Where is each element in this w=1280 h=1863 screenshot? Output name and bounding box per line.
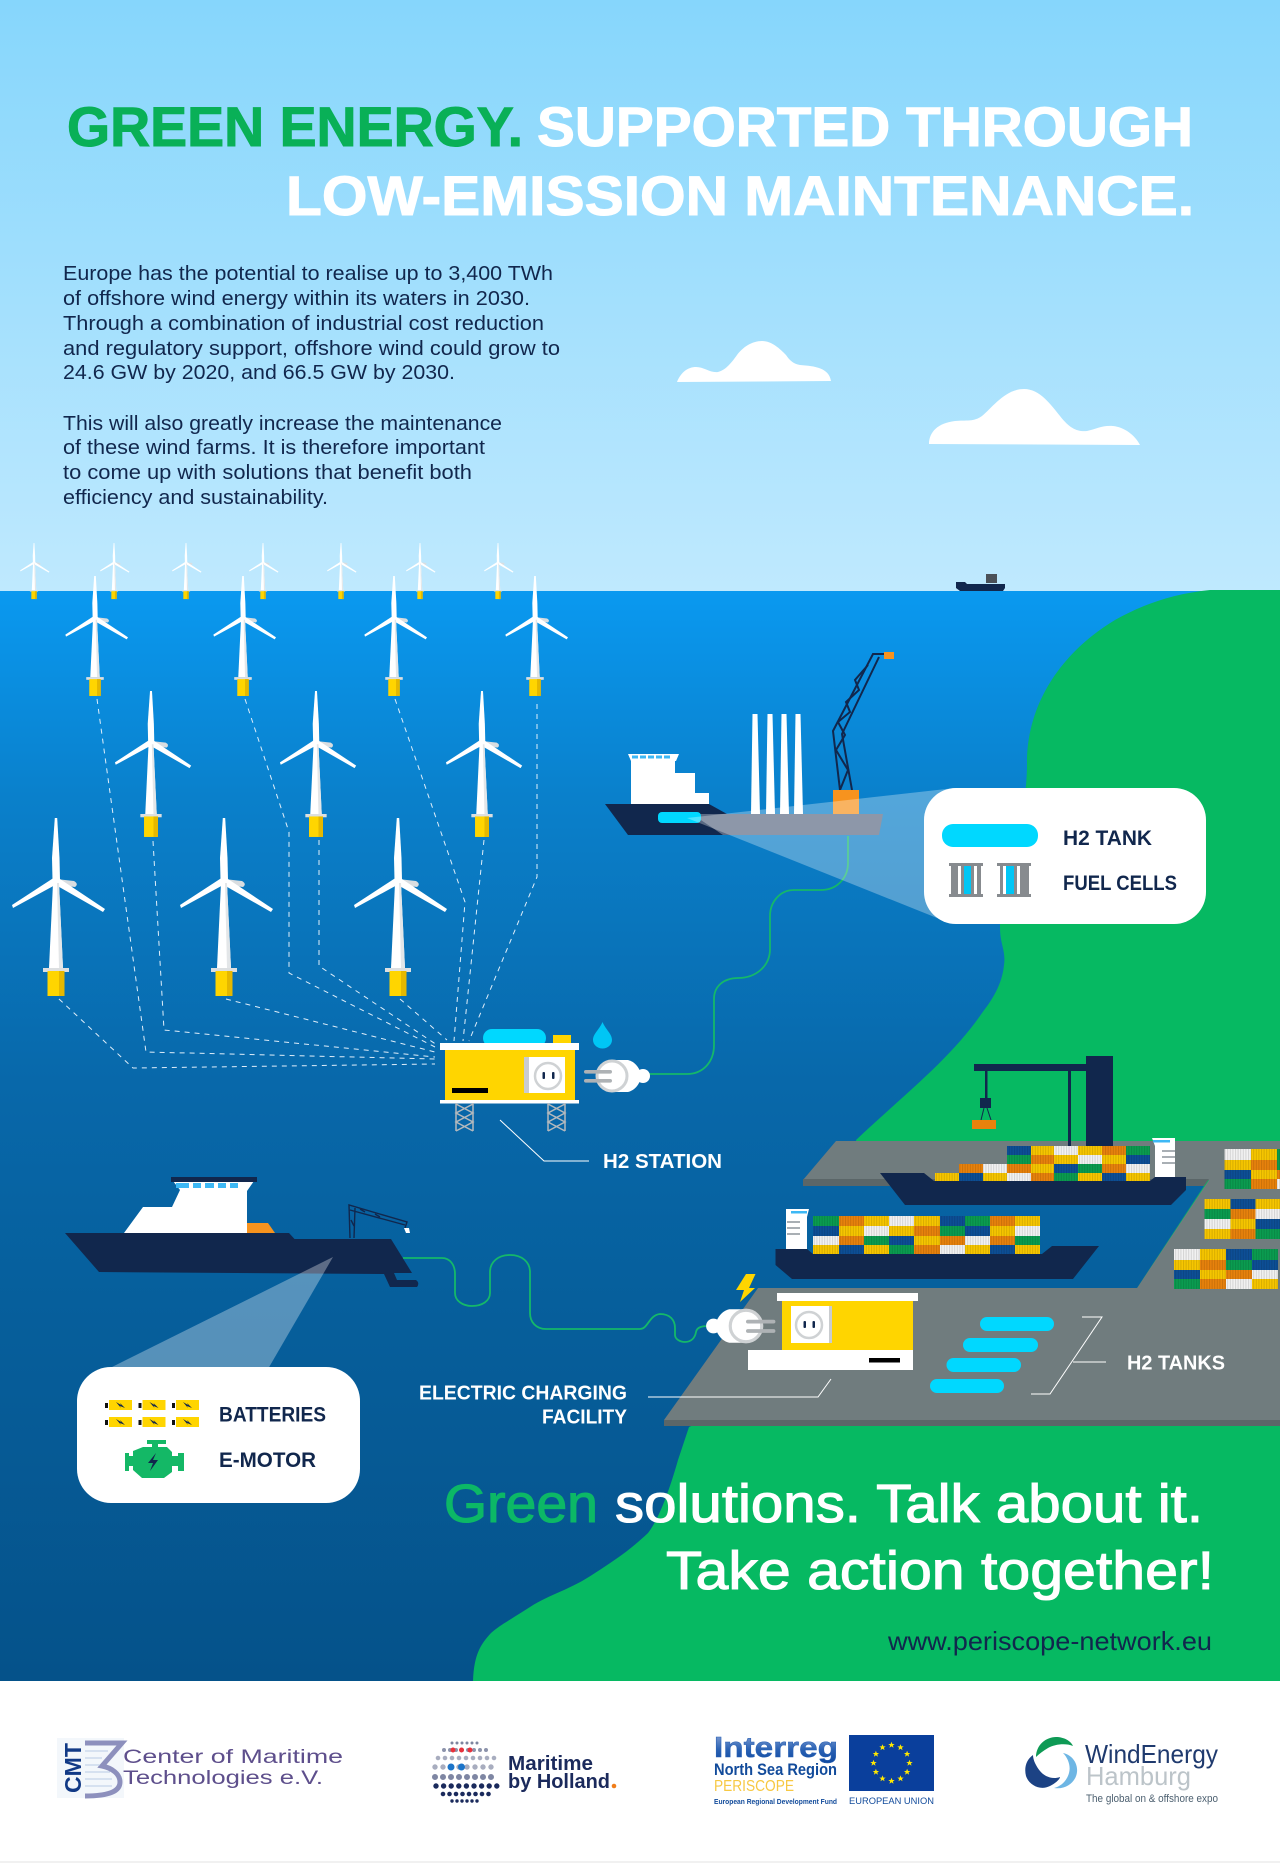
wind turbine array (12, 543, 568, 996)
hull (880, 1173, 1186, 1205)
distant turbines (20, 543, 513, 599)
tank on station roof (483, 1029, 546, 1047)
website url: www.periscope-network.eu (887, 1626, 1212, 1656)
hull (605, 804, 727, 835)
bridge (1152, 1138, 1175, 1177)
callout: batteries and e-motor: BATTERIES (219, 1404, 326, 1426)
intro text: of offshore wind energy within its waters in 2030. (63, 288, 530, 310)
logo: Maritime by Holland (435, 1743, 616, 1801)
charging facility label (419, 1379, 831, 1428)
closing slogan (444, 1474, 1214, 1601)
callout: batteries and e-motor (77, 1367, 360, 1503)
callout: H2 tank and fuel cells: FUEL CELLS (1063, 872, 1177, 895)
harbour water (758, 1186, 1204, 1288)
quay container stacks (1174, 1149, 1280, 1289)
back row turbines (65, 576, 568, 696)
intro text: 24.6 GW by 2020, and 66.5 GW by 2030. (63, 362, 455, 384)
footer bottom strip (0, 1861, 1280, 1863)
logo: Center of Maritime Technologies: Technologies e.V. (123, 1768, 323, 1789)
intro text: to come up with solutions that benefit both (63, 462, 472, 484)
logo: Interreg North Sea Region: PERISCOPE (714, 1778, 794, 1795)
callout: H2 tank and fuel cells: H2 TANK (1063, 827, 1152, 850)
icon: plug H2 station (584, 1060, 650, 1092)
H2 station (440, 1029, 579, 1131)
logo: Interreg North Sea Region (714, 1732, 934, 1807)
H2 station label: H2 STATION (603, 1150, 722, 1173)
charging facility label: ELECTRIC CHARGING (419, 1382, 627, 1404)
dashed power cables to H2 station (59, 699, 537, 1068)
icon: e-motor (125, 1440, 184, 1478)
deck (692, 814, 883, 835)
H2 tanks label: H2 TANKS (1127, 1352, 1225, 1374)
electric charging facility (748, 1293, 918, 1370)
cloud left (677, 341, 831, 382)
container stack C (1174, 1249, 1278, 1289)
logo: Center of Maritime Technologies: Center of Maritime (123, 1747, 343, 1768)
container stack B (1204, 1199, 1280, 1239)
icon: plug charging facility (706, 1309, 775, 1343)
callout: batteries and e-motor: E-MOTOR (219, 1449, 316, 1472)
hull (65, 1233, 418, 1287)
title: LOW-EMISSION MAINTENANCE. (286, 164, 1194, 227)
cable from plug to jack-up vessel (649, 836, 848, 1074)
intro text: Europe has the potential to realise up to 3,400 TWh (63, 263, 553, 285)
hull (776, 1246, 1099, 1279)
title: SUPPORTED THROUGH (537, 95, 1193, 158)
H2 tanks on quay (930, 1317, 1054, 1393)
distant ship (956, 574, 1005, 591)
container stack A (1224, 1149, 1280, 1189)
callout beam: electric vessel (108, 1257, 333, 1369)
containers (935, 1146, 1150, 1182)
small crane (349, 1205, 407, 1238)
port quays (664, 1141, 1280, 1426)
sea background (0, 591, 1280, 1681)
closing slogan: solutions. Talk about it. (615, 1474, 1203, 1534)
intro text: and regulatory support, offshore wind could grow to (63, 338, 560, 360)
intro text (63, 263, 560, 509)
closing slogan: Take action together! (666, 1541, 1214, 1601)
charging facility label: FACILITY (542, 1406, 627, 1428)
logo: WindEnergy Hamburg (1025, 1737, 1218, 1805)
superstructure (124, 1181, 254, 1233)
intro text: of these wind farms. It is therefore important (63, 437, 485, 459)
bridge (786, 1209, 809, 1249)
logo: Interreg North Sea Region: European Regional Development Fund (714, 1797, 837, 1806)
front row turbines (12, 818, 447, 996)
logo: Interreg North Sea Region: North Sea Region (714, 1761, 837, 1779)
crane (833, 654, 884, 790)
icon: lightning bolt (736, 1274, 756, 1302)
jack-up vessel (605, 652, 894, 835)
logo: WindEnergy Hamburg: Hamburg (1086, 1761, 1191, 1791)
green land (473, 590, 1280, 1681)
container ship upper (880, 1138, 1186, 1205)
callout beam: jack-up vessel (687, 788, 955, 918)
logo: Interreg North Sea Region: EUROPEAN UNION (849, 1796, 934, 1807)
closing slogan: Green (444, 1474, 598, 1534)
footer background (0, 1681, 1280, 1863)
monopiles (751, 714, 803, 814)
logo: WindEnergy Hamburg: The global on & offshore expo (1086, 1793, 1218, 1805)
port crane (972, 1056, 1113, 1146)
icon: fuel cells (949, 863, 1031, 897)
logo: Center of Maritime Technologies (57, 1738, 343, 1798)
logo: Maritime by Holland: Maritime (508, 1753, 593, 1775)
intro text: Through a combination of industrial cost reduction (63, 313, 544, 335)
orange deckhouse (247, 1223, 275, 1233)
middle row turbines (115, 691, 522, 837)
superstructure (631, 761, 709, 804)
crane tip (884, 652, 894, 659)
containers (813, 1216, 1040, 1254)
title (67, 95, 1194, 227)
H2 station label (500, 1120, 722, 1173)
title: GREEN ENERGY. (67, 95, 523, 158)
logo: Center of Maritime Technologies: CMT (60, 1743, 86, 1793)
H2 tanks label (1031, 1317, 1225, 1394)
sky background (0, 0, 1280, 591)
logo: WindEnergy Hamburg: WindEnergy (1085, 1739, 1218, 1769)
orange base (833, 790, 859, 814)
cloud right (929, 389, 1140, 445)
intro text: This will also greatly increase the maintenance (63, 413, 502, 435)
logo: Maritime by Holland: by Holland (508, 1771, 610, 1793)
callout: H2 tank and fuel cells (924, 788, 1206, 924)
electric service vessel (65, 1177, 418, 1287)
hull H2 tank (658, 812, 701, 823)
container ship lower (776, 1209, 1099, 1279)
intro text: efficiency and sustainability. (63, 487, 328, 509)
icon: H2 tank (942, 824, 1038, 847)
icon: batteries (105, 1400, 199, 1427)
icon: water drop (593, 1022, 612, 1048)
cable from ship to charging facility (403, 1255, 709, 1342)
logo: Interreg North Sea Region: Interreg (714, 1732, 838, 1764)
